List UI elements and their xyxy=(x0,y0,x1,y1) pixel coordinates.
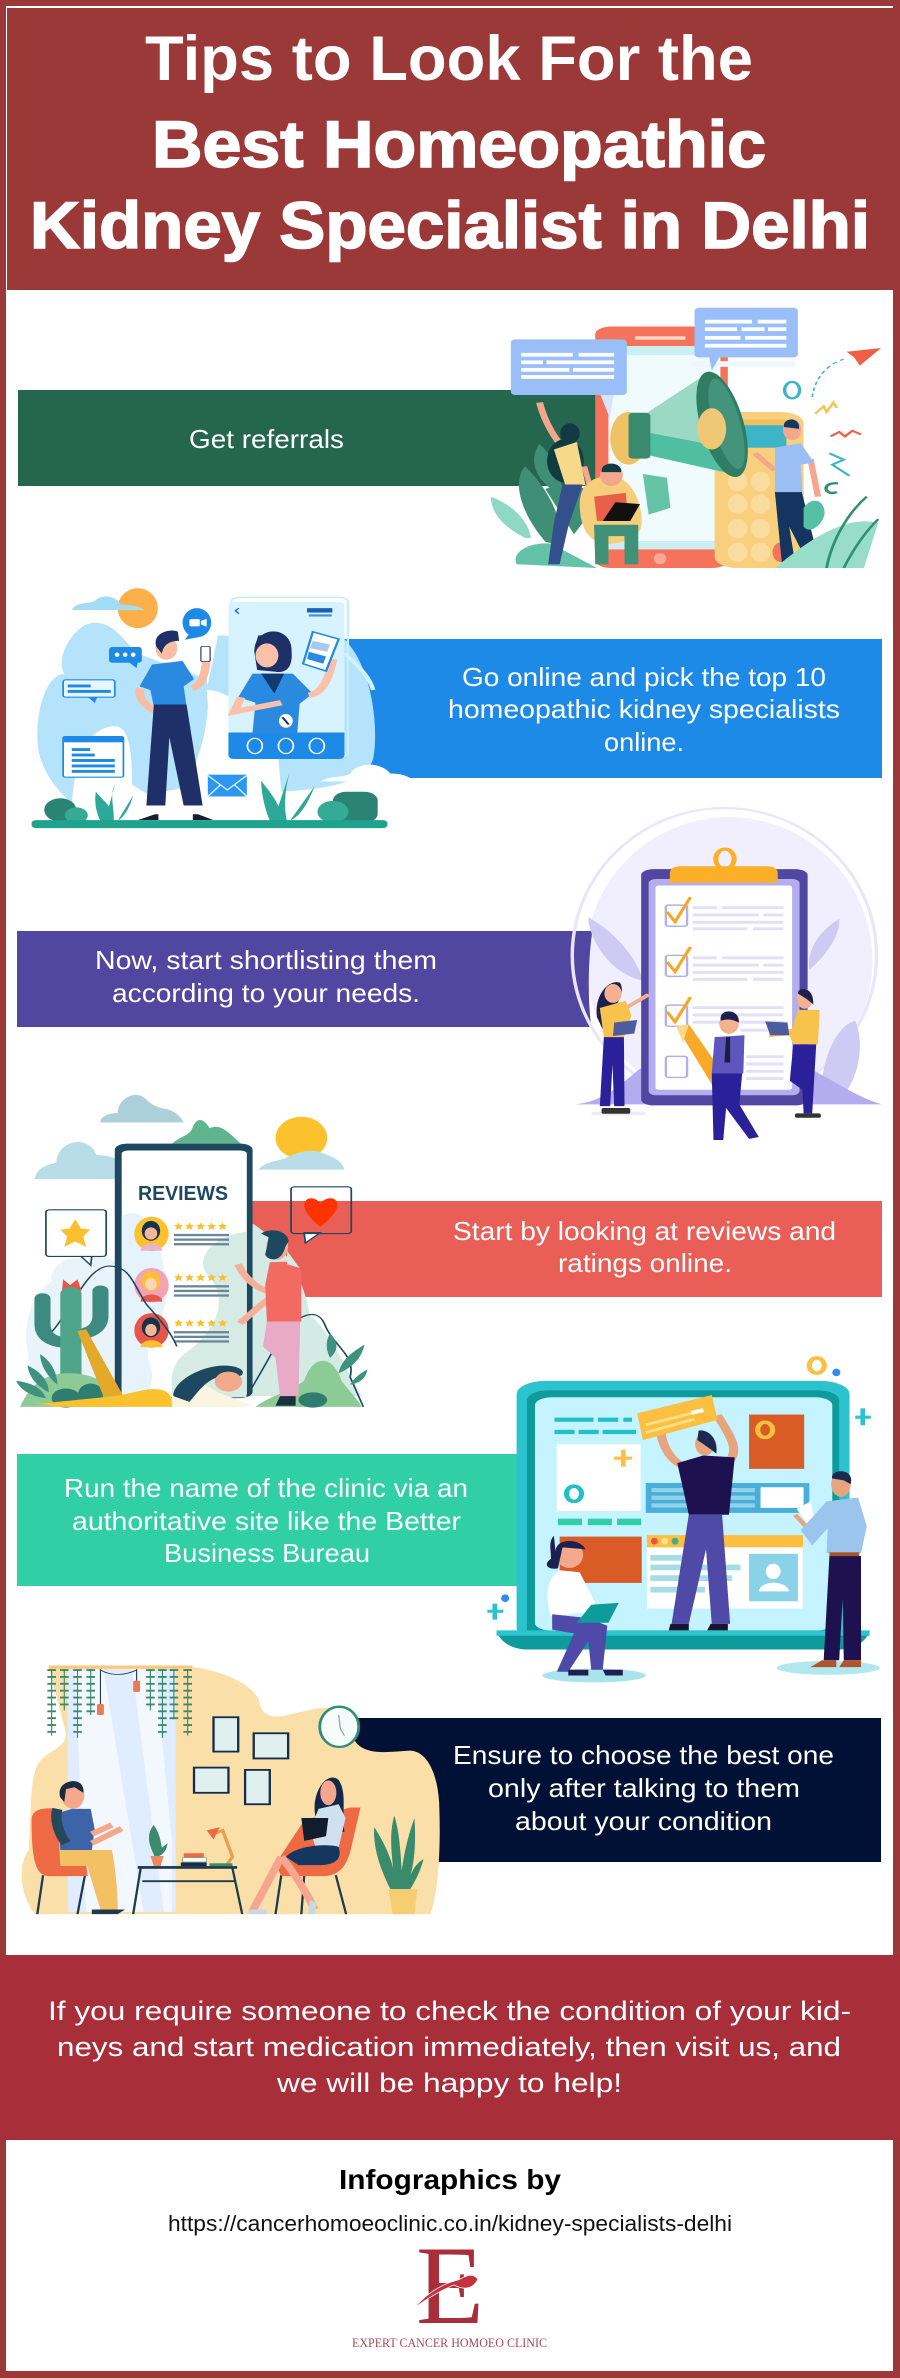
ground xyxy=(32,820,387,828)
message box xyxy=(63,680,115,703)
phone screen xyxy=(228,597,348,759)
tablet xyxy=(497,1381,870,1650)
title line 2: Best Homeopathic xyxy=(152,107,766,181)
lying woman xyxy=(37,1329,253,1408)
heart bubble xyxy=(291,1187,351,1243)
band: go online xyxy=(340,639,882,778)
man in chair xyxy=(32,1781,125,1914)
left plants xyxy=(16,1354,123,1408)
pencil xyxy=(676,1024,736,1103)
woman with tablet xyxy=(597,982,649,1114)
illustration: megaphone and phone xyxy=(491,308,881,568)
clock xyxy=(320,1707,359,1747)
plants left xyxy=(491,444,597,568)
standing man xyxy=(755,419,821,568)
floor plant xyxy=(374,1816,424,1914)
cactus xyxy=(42,1279,100,1398)
illustration: online doctor xyxy=(32,588,414,828)
plants right xyxy=(775,497,878,568)
hanging vines xyxy=(52,1669,188,1738)
band: talking: only after talking to them xyxy=(488,1773,800,1803)
curtain rod xyxy=(49,1665,192,1669)
footer call to action: If you require someone to check the condition of your kid- xyxy=(48,1996,851,2026)
reviews heading: REVIEWS xyxy=(138,1183,228,1205)
band: reviews xyxy=(245,1201,882,1297)
band: get referrals xyxy=(18,390,598,486)
logo xyxy=(352,2224,547,2350)
paper plane and doodles xyxy=(785,348,881,493)
envelope xyxy=(208,775,247,796)
table plant xyxy=(149,1825,168,1866)
footer call to action: we will be happy to help! xyxy=(276,2068,622,2098)
band: better business bureau xyxy=(17,1454,527,1586)
illustration: reviews phone xyxy=(16,1095,367,1408)
band: better business bureau: authoritative site like the Better xyxy=(72,1506,461,1536)
title line 1: Tips to Look For the xyxy=(145,24,753,94)
picture frames xyxy=(194,1717,288,1804)
clouds and sun xyxy=(34,1095,344,1179)
illustration: consultation room xyxy=(22,1665,440,1914)
illustration: checklist xyxy=(571,808,882,1140)
footer call to action: neys and start medication immediately, then visit us, and xyxy=(57,2032,841,2062)
peach background xyxy=(22,1667,440,1914)
footer call to action xyxy=(0,1955,900,2140)
band: talking: about your condition xyxy=(515,1806,772,1836)
right man xyxy=(777,1471,880,1675)
base xyxy=(576,1068,882,1115)
band: better business bureau: Business Bureau xyxy=(164,1538,370,1568)
logo leaf xyxy=(414,2275,478,2308)
band: get referrals: Get referrals xyxy=(189,424,344,454)
speech bubbles xyxy=(511,308,798,418)
band: shortlisting: according to your needs. xyxy=(112,978,420,1008)
title line 3: Kidney Specialist in Delhi xyxy=(30,188,870,262)
screen content xyxy=(554,1415,809,1609)
browser window xyxy=(63,736,123,777)
chat bubble xyxy=(109,647,142,668)
doctor xyxy=(234,631,339,732)
woman waving xyxy=(540,403,591,564)
background blob xyxy=(37,623,375,817)
credit url: https://cancerhomoeoclinic.co.in/kidney-specialists-delhi xyxy=(168,2211,732,2236)
video call bubble xyxy=(183,608,211,640)
bearded man xyxy=(238,1230,301,1406)
band: reviews: ratings online. xyxy=(558,1248,732,1278)
calculator xyxy=(715,412,804,568)
decorative arc xyxy=(344,654,373,690)
band: talking: Ensure to choose the best one xyxy=(453,1740,834,1770)
sun and cloud xyxy=(72,588,158,628)
band: shortlisting xyxy=(17,931,597,1027)
logo name: EXPERT CANCER HOMOEO CLINIC xyxy=(352,2335,547,2350)
megaphone xyxy=(610,369,758,515)
pale backdrop xyxy=(26,1220,362,1396)
woman in chair xyxy=(249,1778,360,1914)
books and lamp xyxy=(181,1827,232,1866)
window xyxy=(68,1669,176,1912)
right plants xyxy=(255,1333,367,1408)
band: shortlisting: Now, start shortlisting them xyxy=(95,945,437,975)
band: better business bureau: Run the name of the clinic via an xyxy=(64,1473,468,1503)
band: reviews: Start by looking at reviews and xyxy=(453,1216,836,1246)
white cloud xyxy=(320,765,414,782)
band: go online: homeopathic kidney specialists xyxy=(448,694,840,724)
man with laptop xyxy=(765,989,821,1118)
curvy line xyxy=(49,1266,363,1407)
seated woman xyxy=(542,1536,646,1682)
illustration: website tablet xyxy=(487,1358,880,1682)
band: go online: Go online and pick the top 10 xyxy=(462,662,826,692)
logo letter: E xyxy=(416,2224,484,2348)
review rows xyxy=(134,1217,229,1348)
checklist items xyxy=(666,897,784,1080)
phone xyxy=(595,327,728,568)
man with tie xyxy=(712,1011,759,1140)
leaves xyxy=(588,917,860,1101)
seated man with laptop xyxy=(580,463,642,564)
coffee table xyxy=(133,1866,242,1914)
man with phone xyxy=(138,630,214,820)
clipboard xyxy=(641,849,808,1105)
decorations xyxy=(487,1358,871,1620)
header banner xyxy=(7,8,900,290)
credit heading: Infographics by xyxy=(339,2164,561,2195)
star bubble xyxy=(46,1210,106,1265)
yellow card xyxy=(637,1395,718,1440)
band: go online: online. xyxy=(604,727,684,757)
man reaching xyxy=(660,1415,735,1630)
lavender circle xyxy=(571,808,876,1104)
plants and bushes xyxy=(44,772,378,823)
band: talking xyxy=(340,1718,881,1862)
phone body xyxy=(115,1144,253,1398)
